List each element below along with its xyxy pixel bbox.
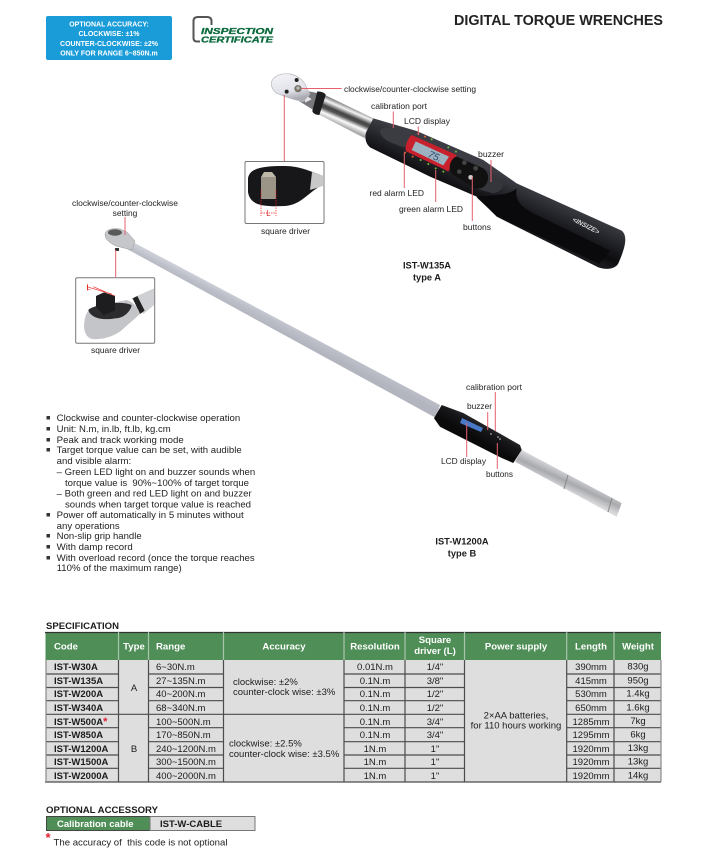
- column: resolution: 0.1N.m: [360, 689, 390, 700]
- column: square driver: 1": [431, 744, 439, 755]
- callout: LCD display A: LCD display: [404, 116, 451, 126]
- callout: calibration port A: calibration port: [371, 101, 428, 111]
- column: resolution: 1N.m: [364, 771, 386, 782]
- column: range: 100~500N.m: [156, 717, 211, 728]
- label lines type A: [284, 88, 491, 221]
- model label type B: IST-W1200A: [435, 536, 489, 546]
- column: weight: [626, 662, 650, 782]
- column: square driver: 1": [431, 771, 439, 782]
- table header: Power supply: [485, 642, 548, 652]
- column: length: 650mm: [575, 703, 607, 714]
- callout: buzzer B: buzzer: [467, 401, 492, 411]
- table body: [46, 660, 661, 782]
- accessory table: IST-W-CABLE: [160, 819, 222, 830]
- column: resolution: 0.1N.m: [360, 703, 390, 714]
- head: [105, 229, 135, 250]
- column: square driver: 1": [431, 757, 439, 768]
- table header: Type: [123, 642, 145, 652]
- table header: driver (L): [414, 646, 456, 657]
- column: square driver: 1/2": [427, 703, 443, 714]
- callout: clockwise/counter-clockwise setting A: clockwise/counter-clockwise setting: [344, 84, 476, 94]
- table header: [45, 632, 661, 660]
- caption: square driver B: square driver: [91, 345, 140, 355]
- feature list: – Green LED light on and buzzer sounds when: [57, 467, 255, 478]
- column: accuracy: [229, 677, 340, 760]
- column: code: IST-W340A: [54, 703, 103, 714]
- inset: type A square driver: L: [266, 209, 271, 218]
- column: resolution: 0.1N.m: [360, 717, 390, 728]
- callout: buttons A: buttons: [463, 222, 491, 232]
- column: square driver: 3/4": [427, 717, 443, 728]
- column: code: IST-W500A*: [54, 716, 108, 728]
- title: DIGITAL TORQUE WRENCHES: [454, 13, 663, 29]
- table header: Weight: [622, 642, 655, 652]
- column: weight: 13kg: [628, 756, 648, 768]
- column: type: [131, 683, 138, 755]
- caption: square driver A: square driver: [261, 226, 310, 236]
- column: resolution: 0.1N.m: [360, 676, 390, 687]
- model label type B: [435, 536, 489, 558]
- wrench type A photo: <INSIZE>: [571, 217, 600, 236]
- optional accuracy badge: COUNTER-CLOCKWISE: ±2%: [60, 41, 159, 48]
- footnote: [46, 830, 228, 848]
- column: code: IST-W200A: [54, 689, 103, 700]
- accessory table: Calibration cable: [57, 819, 134, 830]
- column: square driver: 3/4": [427, 730, 443, 741]
- column: weight: 7kg: [630, 716, 646, 727]
- column: length: [573, 662, 610, 782]
- inset: type B square driver: [76, 278, 155, 343]
- callout: buttons B: buttons: [486, 469, 513, 479]
- feature list: Non-slip grip handle: [57, 531, 142, 542]
- column: code: IST-W1500A: [54, 757, 109, 768]
- button panel: [450, 157, 488, 189]
- long shaft: [127, 241, 440, 418]
- optional accuracy badge: OPTIONAL ACCURACY:: [69, 22, 149, 29]
- callout: calibration port B: calibration port: [466, 382, 523, 392]
- model label type A: [403, 260, 451, 282]
- ring: [312, 91, 326, 115]
- column: type: A: [131, 683, 138, 694]
- column: length: 415mm: [575, 676, 607, 687]
- column: resolution: 0.01N.m: [357, 662, 393, 673]
- feature list: Clockwise and counter-clockwise operation: [57, 413, 240, 424]
- wrench type B photo: [105, 229, 622, 517]
- wrench type A photo: 75.: [426, 149, 443, 165]
- inset: type B square driver: L: [87, 283, 91, 292]
- column: code: IST-W850A: [54, 730, 103, 741]
- column: range: 240~1200N.m: [156, 744, 216, 755]
- column: accuracy: counter-clock wise: ±3%: [233, 687, 336, 698]
- neck: [298, 90, 319, 110]
- column: weight: 13kg: [628, 743, 648, 754]
- label lines type B: [116, 217, 497, 469]
- callout: green alarm LED: green alarm LED: [399, 204, 463, 214]
- optional accuracy badge: CLOCKWISE: ±1%: [78, 31, 140, 38]
- shaft: [313, 93, 373, 138]
- column: range: 27~135N.m: [156, 676, 205, 687]
- column: length: 390mm: [575, 662, 607, 673]
- optional accuracy badge: [46, 16, 172, 60]
- column: range: [156, 662, 216, 782]
- table header: Length: [575, 642, 607, 652]
- feature list: With damp record: [57, 542, 133, 553]
- column: code: IST-W135A: [54, 676, 103, 687]
- feature list: Unit: N.m, in.lb, ft.lb, kg.cm: [57, 424, 171, 435]
- grip: [515, 450, 622, 517]
- table header: Range: [156, 642, 185, 652]
- model label type A: type A: [413, 272, 441, 282]
- column: weight: 830g: [627, 662, 649, 672]
- column: range: 6~30N.m: [156, 662, 195, 673]
- inspection certificate logo: CERTIFICATE: [201, 34, 273, 44]
- column: code: IST-W30A: [54, 662, 98, 673]
- column: range: 300~1500N.m: [156, 757, 216, 768]
- column: length: 530mm: [575, 689, 607, 700]
- red bezel: [406, 135, 457, 172]
- callout: clockwise/counter-clockwise setting B: setting: [113, 208, 138, 218]
- column: range: 400~2000N.m: [156, 771, 216, 782]
- callout: clockwise/counter-clockwise setting B: clockwise/counter-clockwise: [72, 198, 178, 208]
- leds: [420, 138, 457, 173]
- feature list: and visible alarm:: [57, 456, 131, 467]
- table header: Accuracy: [262, 642, 306, 652]
- column: resolution: [357, 662, 393, 782]
- optional accuracy badge: ONLY FOR RANGE 6~850N.m: [60, 50, 158, 57]
- column: code: [54, 662, 109, 782]
- column: power supply: 2×AA batteries,: [484, 710, 548, 722]
- feature list: With overload record (once the torque reaches: [57, 553, 255, 564]
- heading: optional accessory: OPTIONAL ACCESSORY: [46, 805, 158, 815]
- callout: buzzer A: buzzer: [478, 149, 504, 159]
- specification table: [45, 632, 661, 782]
- callout: LCD display B: LCD display: [441, 456, 487, 466]
- table header: Resolution: [350, 642, 400, 652]
- column: length: 1920mm: [573, 744, 610, 755]
- column: range: 68~340N.m: [156, 703, 205, 714]
- feature list: Power off automatically in 5 minutes without: [57, 510, 244, 521]
- column: length: 1285mm: [573, 717, 610, 728]
- feature list: torque value is 90%~100% of target torque: [65, 478, 249, 489]
- black handle: [434, 405, 522, 463]
- column: weight: 950g: [627, 676, 649, 686]
- column: length: 1295mm: [573, 730, 610, 741]
- table header: Code: [54, 642, 78, 652]
- column: code: IST-W1200A: [54, 744, 109, 755]
- column: weight: 6kg: [630, 730, 646, 740]
- feature list: 110% of the maximum range): [57, 563, 182, 574]
- column: accuracy: counter-clock wise: ±3.5%: [229, 749, 340, 760]
- column: resolution: 1N.m: [364, 744, 386, 755]
- handle: [365, 118, 625, 269]
- ratchet head: [271, 74, 310, 102]
- feature list: Target torque value can be set, with audible: [57, 445, 242, 456]
- footnote: *: [46, 830, 52, 845]
- column: power supply: for 110 hours working: [471, 720, 561, 732]
- column: range: 40~200N.m: [156, 689, 205, 700]
- column: weight: 14kg: [628, 770, 648, 782]
- column: accuracy: clockwise: ±2.5%: [229, 738, 302, 750]
- inset: type A square driver: [245, 162, 324, 224]
- column: accuracy: clockwise: ±2%: [233, 677, 298, 688]
- column: length: 1920mm: [573, 771, 610, 782]
- footnote: The accuracy of this code is not optional: [54, 838, 228, 848]
- callout: clockwise/counter-clockwise setting B: [72, 198, 178, 218]
- table header: Square: [419, 635, 451, 646]
- feature list: – Both green and red LED light on and buzzer: [57, 488, 252, 500]
- column: range: 170~850N.m: [156, 730, 211, 741]
- column: square driver: 1/4": [427, 662, 443, 673]
- callout: red alarm LED: red alarm LED: [370, 188, 424, 198]
- model label type A: IST-W135A: [403, 260, 451, 270]
- accessory table: [46, 816, 255, 830]
- column: weight: 1.4kg: [626, 688, 650, 700]
- column: square driver: 1/2": [427, 689, 443, 700]
- column: code: IST-W2000A: [54, 771, 109, 782]
- heading: specification: SPECIFICATION: [46, 621, 119, 631]
- column: square driver: [427, 662, 443, 782]
- feature list: sounds when target torque value is reached: [65, 500, 251, 510]
- model label type B: type B: [448, 548, 476, 558]
- feature list: [46, 413, 255, 574]
- column: type: B: [131, 744, 137, 755]
- column: resolution: 1N.m: [364, 757, 386, 768]
- column: resolution: 0.1N.m: [360, 730, 390, 741]
- wrench type A photo: [271, 74, 625, 269]
- inspection certificate logo: INSPECTION: [201, 26, 274, 36]
- feature list: any operations: [57, 521, 120, 532]
- column: power supply: [471, 710, 561, 732]
- handle groove: [477, 188, 610, 264]
- column: length: 1920mm: [573, 757, 610, 768]
- inspection certificate logo: [194, 17, 274, 44]
- column: weight: 1.6kg: [626, 702, 650, 714]
- feature list: Peak and track working mode: [57, 435, 184, 446]
- column: square driver: 3/8": [427, 676, 443, 687]
